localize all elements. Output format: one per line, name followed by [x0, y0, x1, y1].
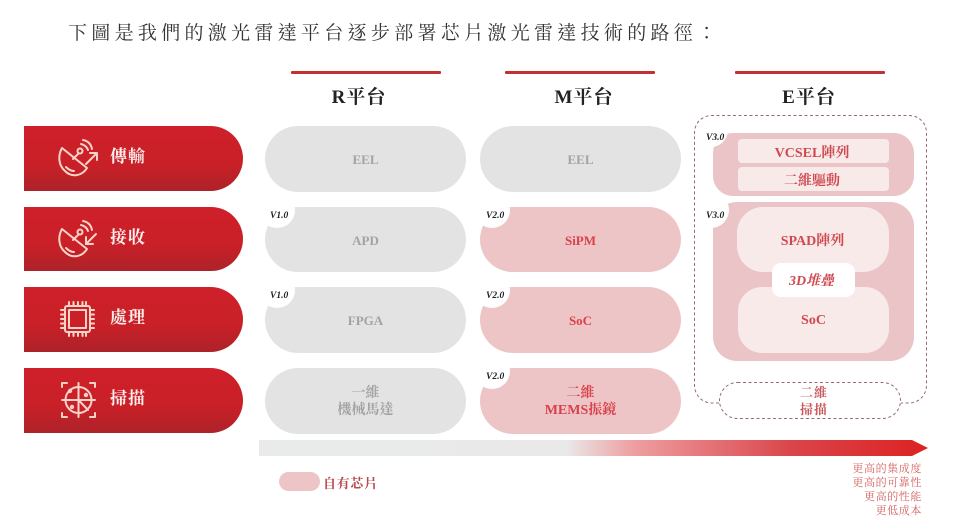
E platform: transmitter panel: [713, 133, 914, 196]
badge cut-out: [694, 113, 728, 147]
benefits text: 更高的可靠性: [852, 477, 922, 489]
title: 下圖是我們的激光雷達平台逐步部署芯片激光雷達技術的路徑：: [68, 23, 720, 44]
2D driver: [738, 167, 889, 191]
VCSEL array: [738, 139, 889, 163]
E platform heading: E平台: [782, 87, 836, 108]
badge cut-out: [693, 192, 729, 228]
row label: scanning: 掃描: [110, 389, 146, 408]
E platform: 2D scanning label: [800, 385, 828, 417]
progress arrow: [259, 440, 928, 456]
3D stacking: [772, 263, 855, 297]
M platform: SoC: SoC: [569, 313, 592, 328]
R version badge: APD: V1.0: [270, 211, 288, 221]
M platform: 2D MEMS mirror: 二維: [566, 386, 594, 401]
R platform: EEL: EEL: [352, 152, 378, 167]
benefits text: 更高的集成度: [852, 462, 922, 474]
M platform rule: [505, 71, 655, 74]
2D driver: 二維驅動: [784, 174, 840, 188]
legend text: 自有芯片: [323, 476, 378, 491]
benefits text: [852, 462, 922, 517]
row label: transmission: 傳輸: [110, 147, 146, 166]
E platform: 2D scanning label: 二維: [800, 385, 828, 400]
row label: transmission: [24, 126, 243, 191]
M platform: SiPM: [480, 207, 681, 272]
M platform heading: M平台: [555, 87, 613, 108]
R platform: 1D mechanical motor: 機械馬達: [338, 403, 394, 418]
M version badge: SiPM: V2.0: [486, 211, 504, 221]
R platform: FPGA: FPGA: [348, 313, 383, 328]
M platform: SiPM: SiPM: [565, 232, 596, 248]
R platform rule: [291, 71, 441, 74]
R platform: FPGA: [265, 287, 466, 353]
3D stacking: 3D堆疊: [789, 274, 834, 289]
M version badge: SoC: V2.0: [486, 291, 504, 301]
E platform dashed frame and scan pill: [694, 115, 927, 419]
R platform heading: R平台: [332, 87, 386, 108]
M platform: SoC: [480, 287, 681, 353]
R platform: APD: APD: [352, 232, 379, 248]
R platform: 1D mechanical motor: [265, 368, 466, 434]
E platform rule: [735, 71, 885, 74]
SoC: [738, 287, 889, 353]
SoC: SoC: [801, 313, 826, 328]
VCSEL array: VCSEL陣列: [775, 146, 849, 161]
benefits text: 更低成本: [876, 505, 922, 517]
R platform: 1D mechanical motor: 一維: [352, 386, 380, 401]
SPAD array: SPAD陣列: [781, 234, 844, 248]
M platform: 2D MEMS mirror: MEMS振鏡: [545, 403, 616, 418]
M platform: 2D MEMS mirror: [480, 368, 681, 434]
E version badge: receiver: V3.0: [706, 211, 724, 221]
benefits text: 更高的性能: [864, 491, 922, 503]
row label: processing: 處理: [110, 308, 146, 327]
legend: own chip: [279, 472, 378, 491]
E platform: 2D scanning label: 掃描: [800, 402, 828, 417]
R platform: EEL: [265, 126, 466, 192]
SPAD array: [737, 207, 889, 272]
row label: reception: [24, 207, 243, 271]
R platform: APD: [265, 207, 466, 272]
row label: scanning: [24, 368, 243, 433]
E platform: receiver panel: [713, 202, 914, 361]
legend swatch: [279, 472, 320, 491]
M platform: EEL: [480, 126, 681, 192]
E version badge: transmitter: V3.0: [706, 133, 724, 143]
row label: processing: [24, 287, 243, 352]
row label: reception: 接收: [110, 228, 146, 247]
M version badge: MEMS: V2.0: [486, 372, 504, 382]
M platform: EEL: EEL: [567, 152, 594, 167]
R version badge: FPGA: V1.0: [270, 291, 288, 301]
